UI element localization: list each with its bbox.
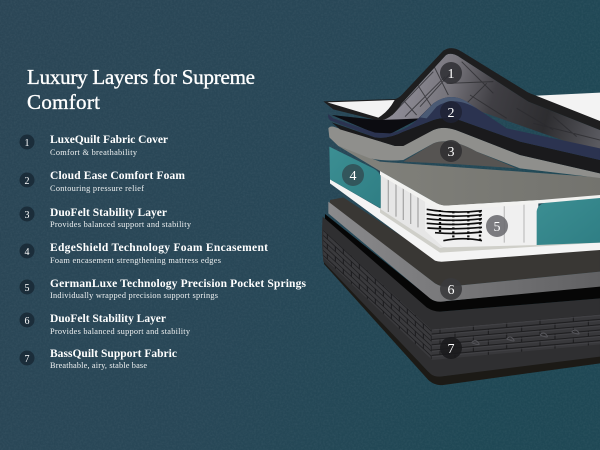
list item 2 (20, 170, 185, 193)
list item 3: Provides balanced support and stability (50, 220, 192, 229)
list item 7: Breathable, airy, stable base (50, 361, 147, 370)
cover black edge (323, 48, 600, 130)
layer 4: left foam encasement (329, 147, 381, 208)
list item 5 (20, 278, 307, 300)
layer 3: felt band (328, 127, 600, 178)
list item 2: 2 (24, 176, 30, 187)
quilted underside (378, 54, 600, 153)
list item 3 (20, 206, 192, 229)
badge 6 (440, 278, 462, 300)
list item 4: Foam encasement strengthening mattress edges (50, 256, 221, 265)
layer 5: pocket springs (330, 173, 600, 262)
white top right (529, 93, 600, 121)
list item 6: DuoFelt Stability Layer (50, 313, 166, 325)
badge 1 (440, 62, 462, 84)
white top left (327, 100, 395, 118)
badge 1: 1 (448, 67, 454, 82)
badge 5 (486, 215, 508, 237)
list item 4 (20, 242, 268, 265)
list item 6: 6 (24, 316, 30, 327)
list item 5: 5 (24, 283, 30, 294)
layer 1: quilted fabric cover (323, 48, 600, 153)
list item 3: DuoFelt Stability Layer (50, 207, 167, 219)
white base tray (330, 179, 600, 262)
layer 6: lower felt layer (328, 197, 600, 302)
list item 3: 3 (24, 210, 30, 221)
list item 1 (20, 134, 168, 157)
badge 7: 7 (448, 342, 454, 357)
lower mattress layers (322, 173, 600, 385)
badge 2: 2 (448, 106, 454, 121)
layer 3: foam surface (338, 146, 600, 206)
layer list (20, 134, 307, 370)
badge 4: 4 (350, 169, 356, 184)
list item 1: LuxeQuilt Fabric Cover (50, 134, 168, 146)
layer 3: felt underside (403, 141, 517, 168)
mattress illustration (322, 48, 600, 385)
list item 4: 4 (24, 247, 30, 258)
list item 6 (20, 312, 191, 336)
list item 4: EdgeShield Technology Foam Encasement (50, 242, 268, 254)
layer 2: comfort foam (328, 97, 600, 160)
title: Comfort (27, 90, 100, 114)
upper mattress layers (323, 48, 600, 211)
list item 6: Provides balanced support and stability (50, 327, 191, 336)
list item 1: 1 (24, 138, 30, 149)
black gap between layers 6 and 7 (325, 214, 600, 312)
left pocket springs (381, 173, 443, 248)
list item 7: BassQuilt Support Fabric (50, 348, 177, 360)
list item 5: GermanLuxe Technology Precision Pocket Springs (50, 278, 307, 290)
list item 1: Comfort & breathability (50, 148, 138, 157)
list item 2: Contouring pressure relief (50, 184, 144, 193)
badge 7 (440, 337, 462, 359)
exposed springs (426, 207, 483, 242)
badge 6: 6 (448, 283, 454, 298)
list item 5: Individually wrapped precision support springs (50, 291, 218, 300)
list item 7: 7 (24, 354, 30, 365)
badge 3: 3 (448, 145, 454, 160)
list item 2: Cloud Ease Comfort Foam (50, 170, 185, 182)
badge 3 (440, 140, 462, 162)
list item 7 (20, 348, 177, 370)
right pocket springs (425, 200, 538, 247)
badge 5: 5 (494, 220, 500, 235)
layer 7: base quilt fabric (322, 217, 600, 385)
title: Luxury Layers for Supreme (27, 65, 255, 89)
badge 2 (440, 101, 462, 123)
black gap under layer 2 (332, 118, 600, 173)
badge 4 (342, 164, 364, 186)
title (27, 65, 255, 114)
right foam encasement (537, 197, 600, 245)
